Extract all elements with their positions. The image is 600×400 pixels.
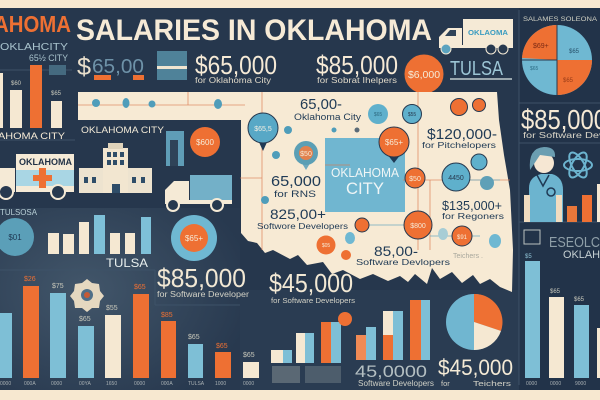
map pins: $800 (410, 223, 426, 230)
panel: Oklahoma City buildings: OKLAHOMA CITY (81, 125, 164, 135)
stat: 45,000 for teachers: for (441, 379, 450, 388)
icon: ambulance Oklahoma: OKLAHOMA (19, 157, 72, 167)
bar chart: center bottom (271, 300, 430, 383)
bar chart: right panel: OKLAH (563, 249, 600, 261)
badge: 65+ ring: $65+ (185, 234, 203, 243)
stat: dollar 65,000 faded: 65,00 (92, 56, 144, 78)
map pins: $65,5 (254, 126, 272, 133)
pie chart: top right (522, 16, 598, 95)
map pins: $91 (457, 235, 468, 241)
map text labels: Softwore Developers (257, 221, 348, 231)
stat: 85,000 for software developer: $85,000 (157, 263, 246, 293)
map text labels: Teichers . (453, 253, 483, 260)
icon: delivery truck (165, 175, 232, 211)
bar chart: right panel: 9000 (575, 381, 586, 387)
bar chart: right panel: 0000 (526, 381, 537, 387)
map text labels: 85,00- (374, 243, 418, 259)
label: Oklahoma City on map: CITY (346, 179, 384, 198)
icon: atom (564, 150, 592, 180)
map text labels: $120,000- (427, 126, 497, 143)
stat: 45,000 for software developers: for Software Developers (271, 296, 355, 305)
icon: delivery truck Oklahoma (439, 19, 513, 54)
title: SALARIES IN OKLAHOMA (76, 14, 432, 47)
label: Oklahoma City on map: OKLAHOMA (331, 165, 399, 180)
icon: nurse (524, 147, 563, 222)
bar chart: bottom left (0, 276, 259, 387)
stat: 65,000 for Oklahoma City: for Oklahoma City (195, 76, 271, 85)
bar chart: bottom left: 0000 (0, 381, 11, 387)
bar chart: bottom left: 0000 (243, 381, 254, 387)
bar chart: bottom left: 000A (24, 381, 36, 387)
stat: 45,000 for software developers: $45,000 (269, 268, 353, 298)
bar chart: bottom left: 00YA (79, 381, 92, 387)
panel: top-left bar chart: 65½ CITY (29, 53, 68, 63)
stat: 85,000 for software developer: for Software Developer (157, 290, 249, 299)
map text labels: 825,00+ (270, 206, 326, 222)
panel: top-left bar chart: $60 (11, 81, 22, 87)
pie chart: top right: SALAMES SOLEONA (523, 16, 598, 23)
map pins: 4450 (448, 175, 464, 182)
bar chart: bottom left: $65 (188, 334, 200, 341)
bar chart: bottom left: $55 (106, 305, 118, 312)
panel: Tulsa: TULSA (106, 256, 148, 270)
map text labels: for Pitchelopers (422, 140, 496, 150)
bar chart: right panel: $65 (550, 289, 561, 295)
stat: 45,000 for teachers: $45,000 (438, 355, 513, 380)
icon: delivery truck Oklahoma: OKLAOMA (468, 30, 508, 37)
badge: 6,000 pin: $6,000 (408, 69, 440, 81)
map pins: $55 (408, 112, 416, 118)
bar chart: bottom left: $85 (161, 312, 173, 319)
stat: 85,000 for helpers: $85,000 (316, 50, 398, 80)
panel: Oklahoma City buildings: $600 (196, 138, 214, 147)
mini bars: right panel (567, 184, 600, 222)
panel: Oklahoma City buildings (79, 125, 220, 193)
bar chart: bottom left: $75 (52, 283, 64, 290)
stat: 45,000 software developers: 45,0000 (355, 362, 427, 381)
panel: top-left bar chart: $65 (51, 91, 62, 97)
pie chart: top right: $65 (563, 78, 574, 84)
map pins (248, 98, 501, 260)
stat: dollar 65,000 faded: $ (77, 53, 91, 81)
stat: 45,000 software developers (355, 362, 434, 388)
label: Tulsa: TULSA (450, 58, 504, 80)
panel: Tulsa (0, 208, 151, 270)
map of Oklahoma (78, 92, 513, 292)
bar chart: bottom left: 0000 (134, 381, 145, 387)
bar chart: bottom left: 1000 (215, 381, 226, 387)
bar chart: right panel (524, 230, 600, 387)
pie chart: bottom centre (446, 294, 502, 350)
marker dots on panhandle (92, 98, 360, 204)
map pins: $50 (300, 151, 312, 158)
panel: top-left bar chart: OKLAHCITY (0, 42, 68, 53)
bar chart: bottom left: 000A (161, 381, 173, 387)
pie chart: top right: $69+ (533, 43, 549, 50)
map pins: $50 (409, 176, 421, 183)
map pins: $65 (374, 112, 382, 118)
stat: 45,000 software developers: Software Developers (358, 379, 434, 388)
bar chart: right panel: $5 (525, 254, 532, 260)
map pins: $65+ (385, 138, 403, 147)
map text labels: Oklahoma City (294, 112, 362, 122)
stat: 85,000 for helpers: for Sobrat Ihelpers (317, 76, 397, 85)
map text labels: for Regoners (442, 211, 504, 221)
bar chart: bottom left: $65 (134, 284, 146, 291)
pie chart: top right: $65 (530, 66, 539, 72)
stat: dollar 65,000 faded (77, 51, 187, 81)
stat: 85,000 for software developers: for Software Devel (523, 131, 600, 140)
bar chart: bottom left: $65 (243, 352, 255, 359)
panel: Tulsa: $01 (8, 233, 22, 242)
map text labels: $135,000+ (442, 198, 502, 213)
panel: top-left bar chart (0, 42, 68, 142)
bar chart: bottom left: TULSA (188, 381, 205, 387)
label: Oklahoma City on map (331, 165, 399, 198)
stat: 65,000 for Oklahoma City: $65,000 (195, 50, 277, 80)
panel: Tulsa: TULSOSA (0, 208, 38, 217)
map text labels: 65,00- (300, 96, 342, 113)
bar chart: bottom left: $65 (79, 316, 91, 323)
map text labels (257, 96, 504, 267)
map pins: $05 (322, 243, 330, 249)
map text labels: Software Devlopers (356, 257, 450, 267)
badge: 6,000 pin (404, 54, 444, 105)
bar chart: bottom left: 0000 (51, 381, 62, 387)
map text labels: for RNS (274, 189, 316, 200)
icon: ambulance Oklahoma (0, 154, 74, 199)
bar chart: right panel: 0000 (550, 381, 561, 387)
bar chart: bottom left: $65 (216, 343, 228, 350)
stat: 45,000 for teachers: Teichers (473, 379, 511, 388)
pie chart: top right: $65 (569, 49, 580, 55)
bar chart: bottom left: 1650 (106, 381, 117, 387)
bar chart: right panel: $65 (574, 297, 585, 303)
map text labels: 65,000 (271, 173, 321, 190)
bar chart: bottom left: $26 (24, 276, 36, 283)
badge: 65+ ring (171, 215, 217, 261)
